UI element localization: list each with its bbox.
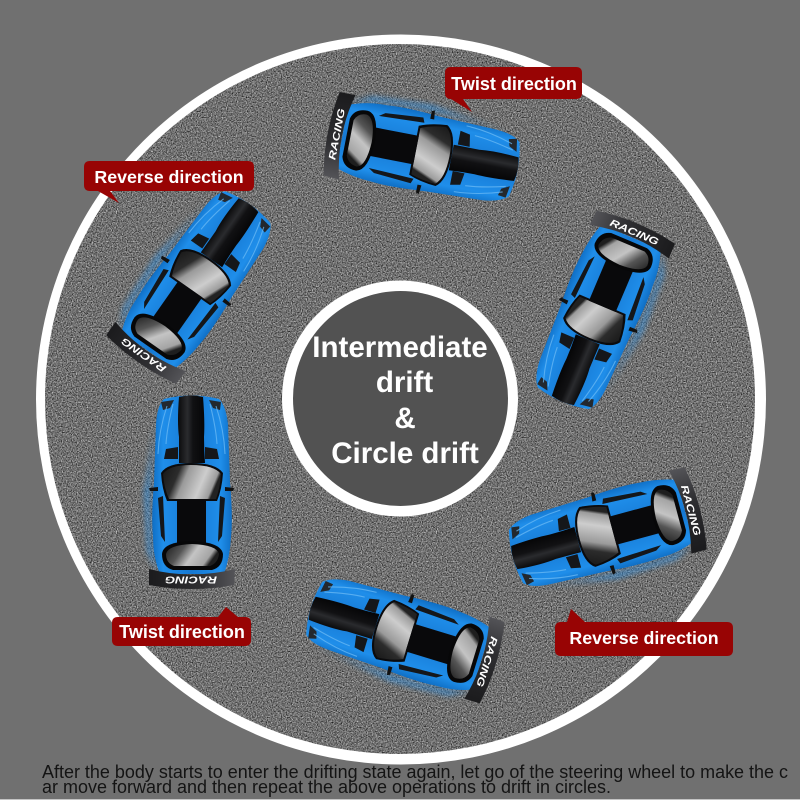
car: lower right [501, 465, 712, 603]
callout: twist direction bottom: Twist direction [119, 622, 245, 642]
car: upper right: RACING [608, 218, 660, 248]
car: bottom: RACING [473, 635, 499, 688]
car: bottom [297, 566, 509, 709]
car: upper left [100, 177, 285, 388]
callout: reverse direction right [555, 609, 733, 656]
car: lower right: RACING [678, 484, 702, 537]
caption [42, 761, 788, 797]
centre line: drift: drift [376, 366, 433, 399]
callout: twist direction bottom [112, 607, 251, 646]
callout: reverse direction right: Reverse direction [569, 628, 719, 648]
bottom strip [0, 799, 800, 800]
callout: reverse direction left: Reverse direction [94, 167, 244, 187]
car: top: RACING [327, 108, 348, 161]
callout: reverse direction left [84, 161, 254, 203]
centre title: Intermediate [312, 331, 488, 364]
car: upper left: RACING [119, 335, 169, 374]
centre badge [282, 280, 518, 516]
car: lower left [144, 396, 235, 589]
caption: ar move forward and then repeat the above operations to drift in circles. [42, 776, 611, 797]
car: lower left: RACING [165, 574, 217, 584]
caption: After the body starts to enter the drifting state again, let go of the steering wheel to make the c [42, 761, 788, 782]
callout: twist direction top [445, 67, 582, 112]
car: top [319, 86, 527, 213]
centre line: ampersand: & [394, 402, 416, 435]
callout: twist direction top: Twist direction [451, 74, 577, 94]
centre line: circle drift: Circle drift [331, 437, 479, 470]
car: upper right [522, 207, 681, 420]
